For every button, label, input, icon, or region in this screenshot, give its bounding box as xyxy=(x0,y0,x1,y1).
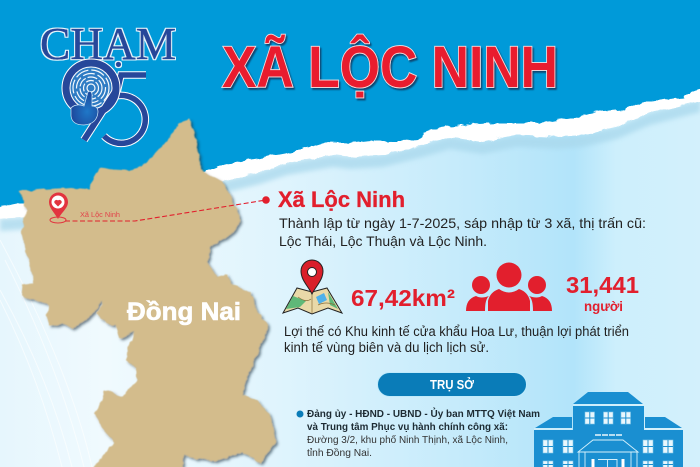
population value: 31,441 xyxy=(566,272,639,298)
fingerprint xyxy=(73,70,109,106)
blue header band with torn paper edge xyxy=(0,0,700,219)
headquarters address: và Trung tâm Phục vụ hành chính công xã: xyxy=(307,421,508,433)
headquarters address: Đường 3/2, khu phố Ninh Thịnh, xã Lộc Ninh, xyxy=(307,434,508,446)
advantages text: kinh tế vùng biên và du lịch lịch sử. xyxy=(284,340,489,355)
headquarters address: tỉnh Đồng Nai. xyxy=(307,447,372,459)
headquarters address xyxy=(307,407,540,459)
map shape xyxy=(20,119,275,467)
population unit: người xyxy=(584,298,623,314)
icon: building xyxy=(534,392,683,467)
hand xyxy=(71,91,98,125)
commune label: Xã Lộc Ninh xyxy=(80,212,120,219)
intro text: Thành lập từ ngày 1-7-2025, sáp nhập từ 3 xã, thị trấn cũ: xyxy=(279,215,646,231)
area value: 67,42km² xyxy=(351,285,455,311)
background light rays xyxy=(0,240,92,467)
title: XÃ LỘC NINH xyxy=(222,35,558,100)
logo wordmark: CHẠM xyxy=(40,18,176,69)
commune heading: Xã Lộc Ninh xyxy=(278,187,405,212)
number 9 xyxy=(66,63,116,140)
commune pin xyxy=(49,193,68,223)
connector dot xyxy=(262,196,270,204)
torn paper shadow band xyxy=(0,100,700,231)
icon: map with pin xyxy=(283,260,342,314)
headquarters address: Đảng ủy - HĐND - UBND - Ủy ban MTTQ Việt Nam xyxy=(307,407,540,420)
icon: people xyxy=(466,262,552,311)
number 5 xyxy=(104,75,146,143)
advantages text: Lợi thế có Khu kinh tế cửa khẩu Hoa Lư, thuận lợi phát triển xyxy=(284,324,629,339)
map label: Đồng Nai xyxy=(127,298,241,326)
intro text xyxy=(279,215,646,249)
headquarters button: TRỤ SỞ xyxy=(430,377,475,392)
logo: Chạm 95 xyxy=(40,18,176,143)
headquarters button xyxy=(378,372,526,396)
dashed connector xyxy=(65,200,266,221)
intro text: Lộc Thái, Lộc Thuận và Lộc Ninh. xyxy=(279,233,487,249)
province map xyxy=(20,119,275,467)
advantages text xyxy=(284,324,629,355)
bullet xyxy=(296,410,304,418)
